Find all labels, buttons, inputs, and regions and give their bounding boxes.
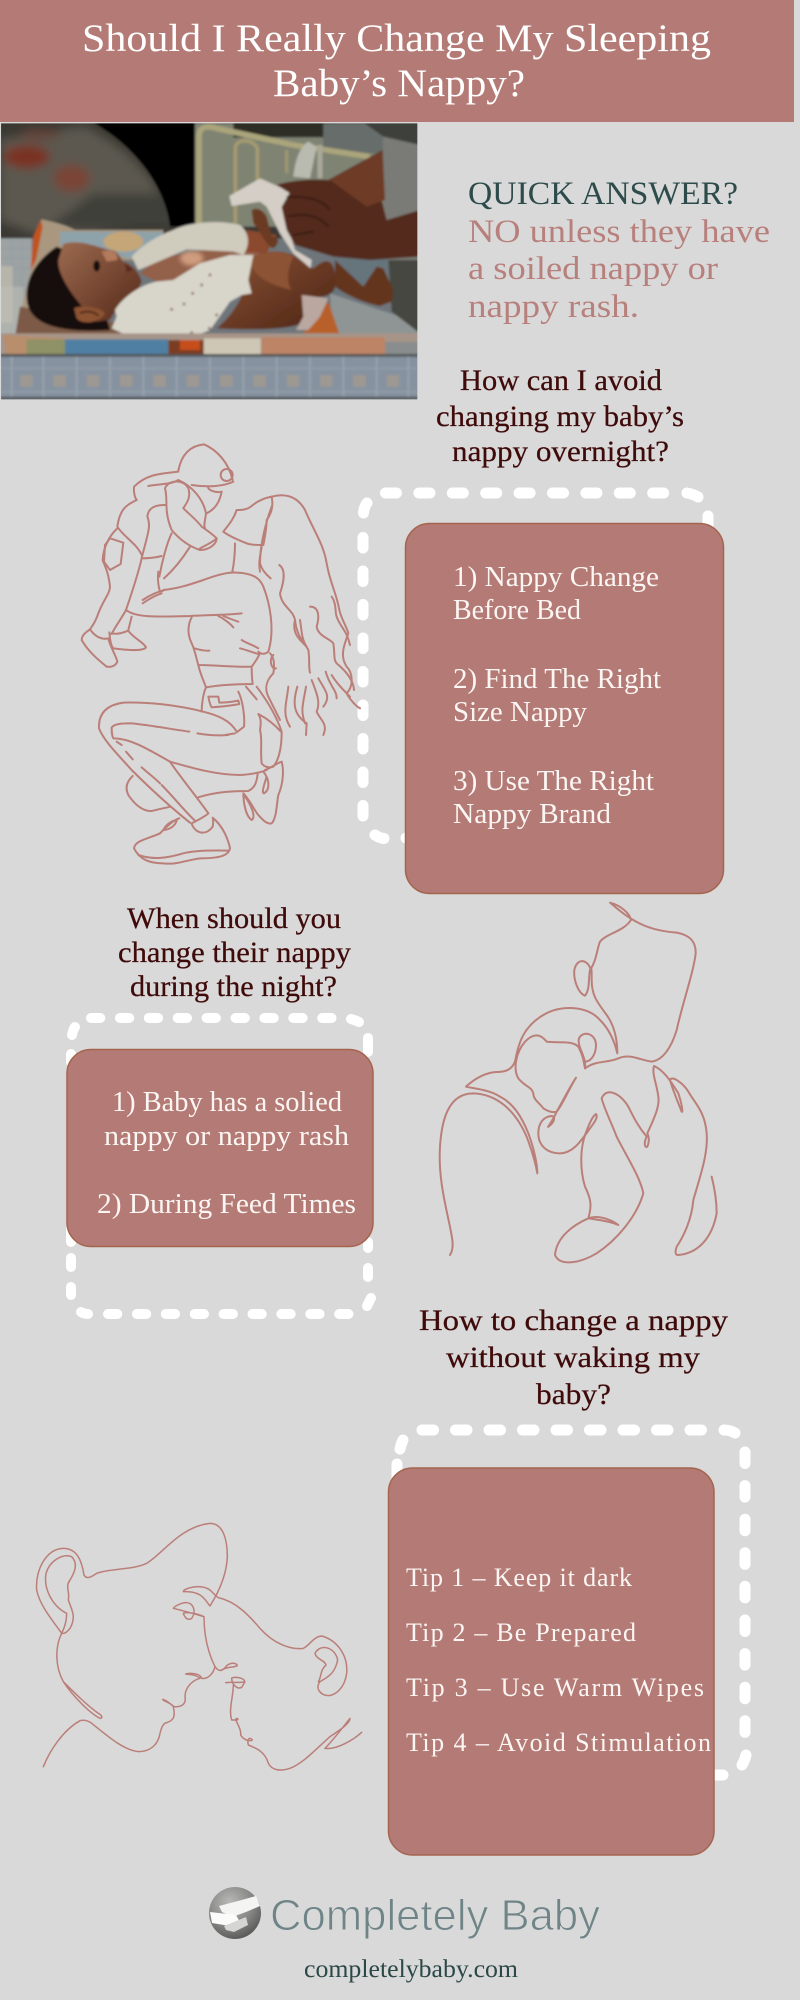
dashed frame: overnight tips [363,493,708,838]
photo: parent changing baby's nappy [0,120,420,403]
panel: tips: Tip 4 – Avoid Stimulation [406,1728,711,1757]
logo: globe with hands [209,1887,261,1939]
panel: overnight tips: 3) Use The Right [453,766,654,797]
heading: avoid changing overnight: nappy overnight? [452,435,669,468]
panel: tips: Tip 1 – Keep it dark [406,1563,632,1592]
panel: overnight tips: 1) Nappy Change [453,562,659,593]
quick answer text: a soiled nappy or [468,251,718,287]
panel: night change reasons: 1) Baby has a solied [112,1087,342,1118]
cardigan top [132,222,248,270]
quick answer text [468,176,770,325]
right spotted mat [330,293,418,334]
belly / legs [217,251,335,329]
heading: when to change at night: change their nappy [118,936,351,969]
panel: night change reasons: 2) During Feed Times [97,1189,356,1220]
heading: avoid changing overnight [436,364,684,468]
illustration: mother lifting child [82,444,360,864]
nappy [296,295,328,330]
ear [74,307,105,322]
wipe [229,178,312,268]
title banner: Baby’s Nappy? [273,62,525,105]
mat back [31,237,396,334]
illustration: parent holding baby on shoulder [440,903,717,1262]
heading: avoid changing overnight: changing my baby’s [436,400,684,433]
dashed frame: night change reasons [71,1018,371,1314]
background blanket, blurred [1,124,182,236]
panel: overnight tips [406,524,724,894]
crib [195,123,392,227]
dashed frame: tips [397,1430,746,1775]
heading: when to change at night: during the night? [130,970,337,1003]
panel: overnight tips: 2) Find The Right [453,664,661,695]
pad stripe [0,333,420,355]
panel: overnight tips: Before Bed [453,595,581,626]
panel: tips: Tip 2 – Be Prepared [406,1618,636,1647]
pillow [22,218,165,309]
panel: overnight tips: Nappy Brand [453,799,611,830]
quick answer text: nappy rash. [468,289,639,325]
heading: change without waking: How to change a nappy [419,1304,728,1337]
hair back [27,247,110,331]
website url: completelybaby.com [304,1956,519,1983]
logo wordmark: Completely Baby [270,1891,600,1940]
heading: when to change at night [118,902,351,1003]
gray shirt [384,138,418,260]
quick answer text: QUICK ANSWER? [468,176,738,212]
panel: tips: Tip 3 – Use Warm Wipes [406,1673,704,1702]
panel: overnight tips: Size Nappy [453,697,587,728]
cardigan front [112,255,253,338]
hand and arm [277,150,420,260]
panel: night change reasons: nappy or nappy rash [104,1121,349,1152]
face [58,242,142,322]
quick answer text: NO unless they have [468,214,770,250]
title banner: Should I Really Change My Sleeping [82,17,711,60]
heading: change without waking: without waking my [446,1341,700,1374]
title banner [0,0,794,122]
heading: avoid changing overnight: How can I avoid [460,364,662,397]
plaid [0,357,420,403]
heading: when to change at night: When should you [127,902,341,935]
panel: tips [388,1468,714,1855]
heading: change without waking: baby? [536,1378,611,1411]
illustration: parent and baby faces [37,1523,362,1770]
dark gap [90,120,197,227]
peach wrap under baby [303,302,341,337]
chest [140,250,260,282]
panel: night change reasons [67,1050,373,1246]
heading: change without waking [419,1304,728,1411]
